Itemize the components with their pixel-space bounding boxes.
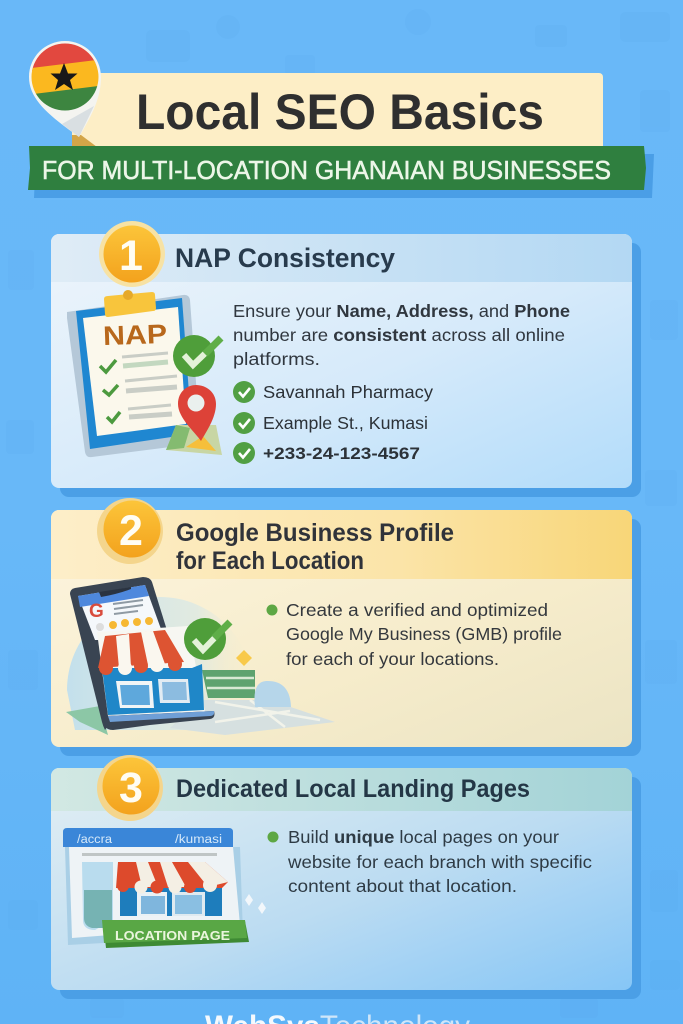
number badge 3 [97, 755, 163, 821]
panel header [51, 234, 632, 282]
number badge 1: 1 [119, 232, 143, 280]
number badge 2 [97, 498, 163, 564]
heading: NAP Consistency [175, 243, 395, 273]
NAP checklist: +233-24-123-4567 [263, 445, 420, 463]
number badge 2: 2 [119, 507, 143, 555]
description text [268, 827, 592, 896]
number badge 1 [99, 221, 165, 287]
icon: NAP clipboard [67, 290, 222, 457]
panel header [51, 768, 632, 811]
description text: website for each branch with specific [287, 852, 592, 872]
description text [233, 301, 570, 369]
description text: number are consistent across all online [233, 325, 565, 345]
description text: Create a verified and optimized [286, 600, 548, 620]
description text: for each of your locations. [286, 649, 499, 669]
icon: location page browser: /accra [77, 834, 113, 846]
icon: NAP clipboard: NAP [102, 319, 168, 351]
heading [176, 519, 454, 575]
heading: Google Business Profile [176, 519, 454, 547]
title panel [72, 73, 603, 153]
icon: Ghana flag pin [29, 41, 101, 137]
panel: Google Business Profile [51, 498, 641, 756]
description text: Ensure your Name, Address, and Phone [233, 301, 570, 321]
icon: phone with storefront [66, 577, 335, 735]
NAP checklist: Savannah Pharmacy [263, 382, 433, 402]
icon: location page browser [63, 828, 266, 948]
description text [266, 600, 562, 669]
description text: Build unique local pages on your [288, 827, 559, 847]
panel: Dedicated Local Landing Pages [51, 755, 641, 999]
subtitle ribbon [28, 135, 654, 198]
subtitle ribbon: FOR MULTI-LOCATION GHANAIAN BUSINESSES [42, 155, 611, 185]
NAP checklist [233, 381, 433, 464]
NAP checklist: Example St., Kumasi [263, 413, 428, 433]
icon: phone with storefront: G [89, 601, 104, 622]
panel header [51, 510, 632, 579]
panel: NAP consistency [51, 221, 641, 497]
heading: Dedicated Local Landing Pages [176, 775, 530, 803]
description text: platforms. [233, 349, 320, 369]
heading: for Each Location [176, 547, 364, 575]
icon: location page browser: LOCATION PAGE [115, 928, 230, 943]
icon: location page browser: /kumasi [175, 834, 222, 846]
description text: content about that location. [288, 876, 517, 896]
number badge 3: 3 [119, 764, 143, 812]
description text: Google My Business (GMB) profile [286, 624, 562, 644]
title: Local SEO Basics [136, 84, 544, 140]
